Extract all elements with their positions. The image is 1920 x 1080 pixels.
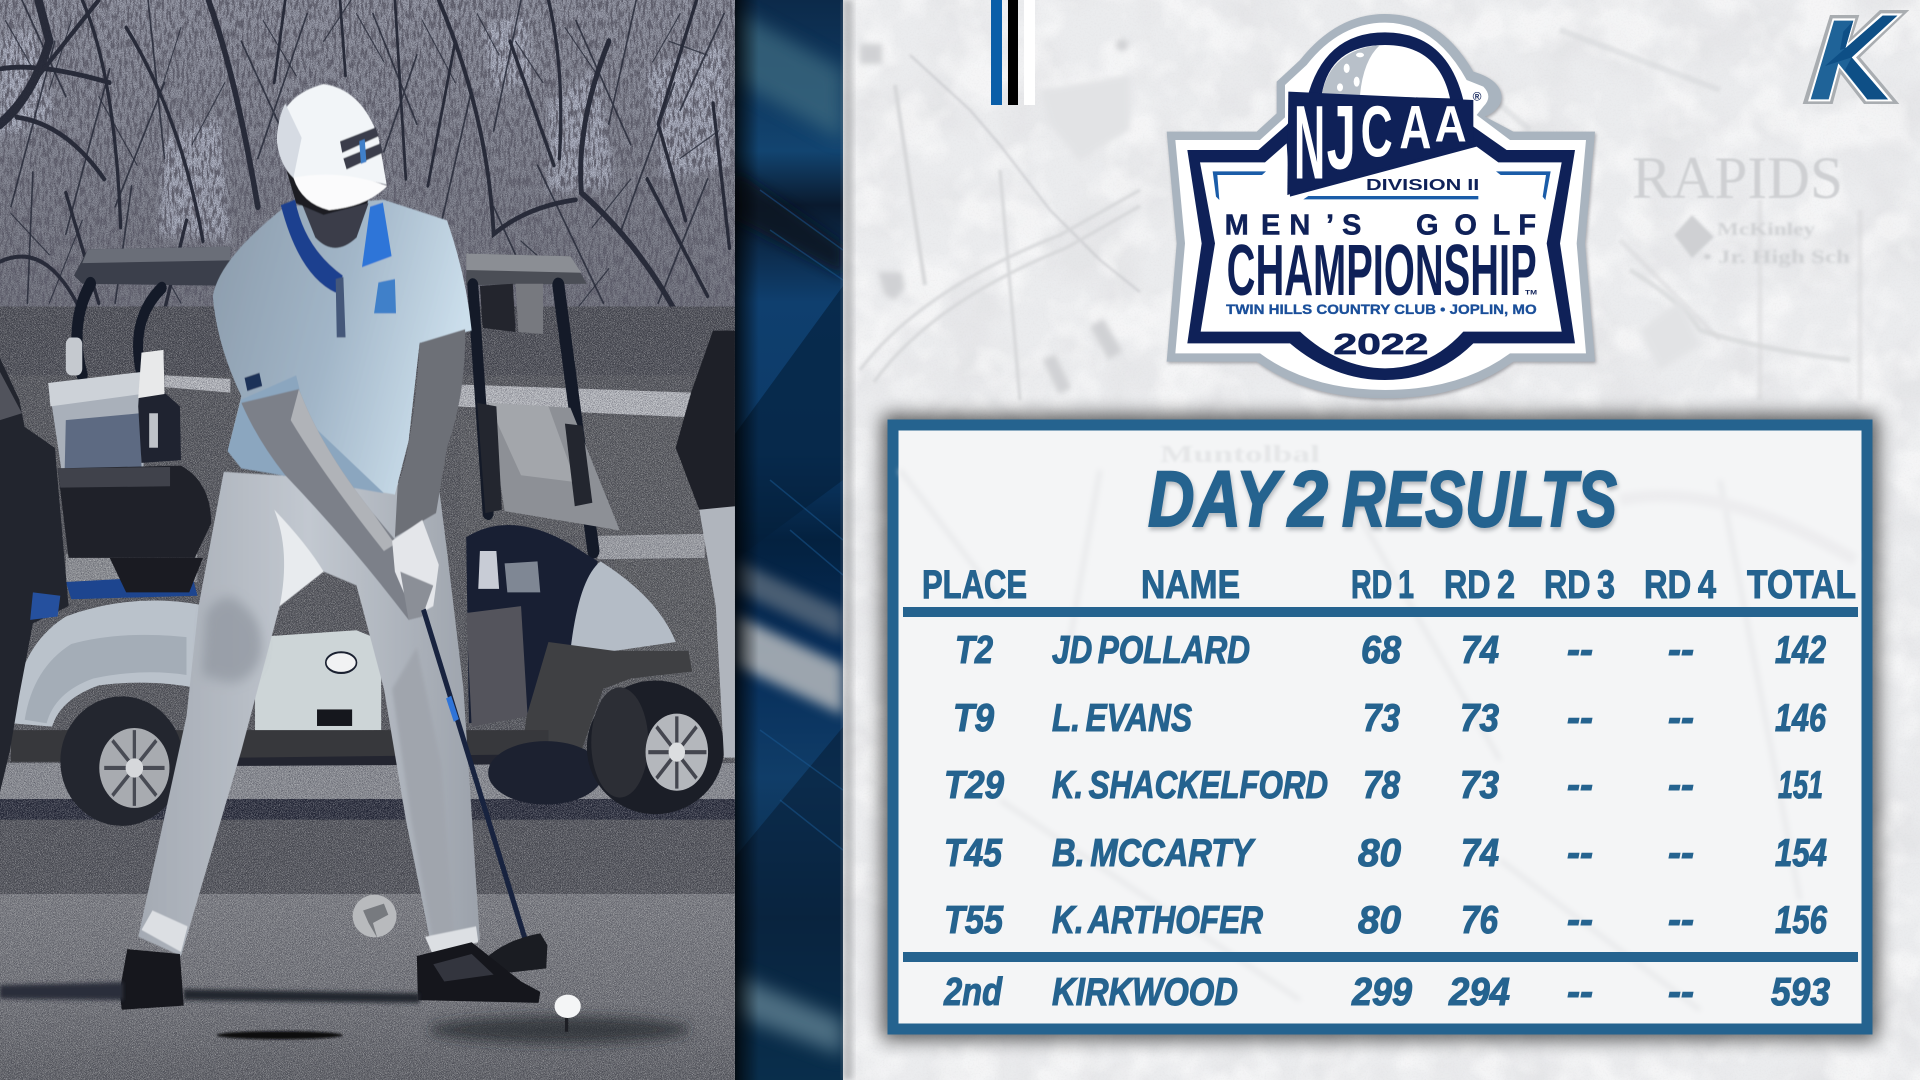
- hedge and cart path: [0, 307, 735, 847]
- row: K. Arthofer: T55: [944, 899, 1004, 942]
- map label: McKinley: McKinley: [1717, 219, 1815, 239]
- NJCAA banner: C: [1361, 92, 1393, 172]
- row: K. Arthofer: 76: [1461, 899, 1498, 942]
- row: team total Kirkwood: 593: [1771, 971, 1830, 1014]
- collar: [281, 200, 343, 293]
- icon: hawk watermark: [353, 895, 397, 938]
- panel: day 2 results table: [882, 414, 1878, 1040]
- row: team total Kirkwood: 294: [1448, 971, 1510, 1014]
- golf cart: [11, 247, 724, 826]
- row: B. McCarty: B. MCCARTY: [1052, 832, 1255, 875]
- heading: 2: [1286, 454, 1328, 543]
- panel: abstract blue streak stripe: [735, 0, 843, 1080]
- logo white layer: [1175, 23, 1586, 390]
- NJCAA banner: [1287, 84, 1473, 202]
- row: K. Shackelford: [944, 764, 1823, 807]
- row: K. Shackelford: 151: [1778, 764, 1823, 807]
- row: JD Pollard: 142: [1775, 629, 1826, 672]
- blue corner accents: [1213, 171, 1551, 200]
- table header row: TOTAL: [1747, 563, 1856, 607]
- table header row: RD 1: [1351, 563, 1414, 607]
- row: L. Evans: T9: [953, 697, 994, 740]
- logo white centre: [1200, 143, 1562, 368]
- row: K. Shackelford: 73: [1460, 764, 1499, 807]
- photo: golfer teeing off by a golf cart: [0, 0, 735, 1080]
- Division II text: DIVISION II: [1366, 177, 1479, 194]
- row: L. Evans: 146: [1775, 697, 1826, 740]
- registered mark: ®: [1473, 90, 1482, 104]
- row: B. McCarty: T45: [944, 832, 1003, 875]
- row: team total Kirkwood: 299: [1351, 971, 1412, 1014]
- row: K. Arthofer: K. ARTHOFER: [1052, 899, 1263, 942]
- table header row: NAME: [1141, 563, 1240, 607]
- pants: [138, 472, 480, 956]
- table header row: RD 2: [1444, 563, 1515, 607]
- map marker: school: [1674, 215, 1714, 258]
- venue text: TWIN HILLS COUNTRY CLUB • JOPLIN, MO: [1226, 301, 1537, 317]
- NJCAA banner: A: [1399, 95, 1431, 162]
- row: team total Kirkwood: [943, 971, 1830, 1014]
- logo grey outer silhouette: [1167, 14, 1595, 398]
- map label: Jr. High Sch: • Jr. High Sch: [1703, 247, 1851, 268]
- row: B. McCarty: --: [1668, 832, 1694, 875]
- row: JD Pollard: 68: [1361, 629, 1401, 672]
- row: JD Pollard: T2: [955, 629, 993, 672]
- row: JD Pollard: 74: [1461, 629, 1499, 672]
- shirt: [213, 200, 472, 495]
- golf ball on tee: [555, 995, 581, 1032]
- logo: NJCAA Division II Men's Golf Championship: [1166, 14, 1598, 402]
- head and cap: [277, 131, 370, 215]
- map label: Rapids: RAPIDS: [1632, 145, 1843, 211]
- NJCAA banner: A: [1435, 97, 1467, 153]
- bystander: right: [676, 331, 735, 758]
- bystander: left: [0, 358, 69, 792]
- row: K. Arthofer: --: [1567, 899, 1593, 942]
- row: B. McCarty: [944, 832, 1827, 875]
- icon: golf ball: [1322, 45, 1450, 98]
- row: team total Kirkwood: --: [1668, 971, 1694, 1014]
- arms: [242, 388, 408, 620]
- heading: RESULTS: [1342, 454, 1617, 543]
- row: K. Shackelford: T29: [944, 764, 1004, 807]
- row: L. Evans: 73: [1363, 697, 1400, 740]
- row: team total Kirkwood: 2nd: [943, 971, 1003, 1014]
- row: B. McCarty: --: [1567, 832, 1593, 875]
- row: JD Pollard: JD POLLARD: [1052, 629, 1250, 672]
- row: JD Pollard: --: [1567, 629, 1593, 672]
- row: B. McCarty: 74: [1461, 832, 1499, 875]
- tree line background: [0, 0, 735, 331]
- heading: [1148, 454, 1617, 543]
- hand and glove: [392, 520, 439, 616]
- row: L. Evans: [953, 697, 1826, 740]
- NJCAA banner: N: [1294, 84, 1325, 202]
- row: K. Arthofer: 80: [1358, 899, 1401, 942]
- table header row: RD 3: [1544, 563, 1615, 607]
- Men's Golf text: MEN’SGOLF: [1225, 209, 1536, 241]
- row: K. Shackelford: 78: [1363, 764, 1400, 807]
- watermark map label: Muntolbal: [1160, 442, 1320, 468]
- NJCAA banner: J: [1327, 86, 1356, 188]
- row: K. Arthofer: [944, 899, 1827, 942]
- row: team total Kirkwood: KIRKWOOD: [1052, 971, 1238, 1014]
- background: faded street map: [843, 0, 1920, 1080]
- icon: Kirkwood K logo: [1802, 10, 1910, 104]
- shoes: [120, 942, 540, 1010]
- row: L. Evans: 73: [1460, 697, 1499, 740]
- golf club: [423, 610, 547, 973]
- row: K. Arthofer: --: [1668, 899, 1694, 942]
- rough grass and fairway: [0, 820, 735, 1080]
- table header row: [922, 563, 1856, 607]
- row: K. Arthofer: 156: [1775, 899, 1827, 942]
- row: L. Evans: --: [1668, 697, 1694, 740]
- row: K. Shackelford: K. SHACKELFORD: [1052, 764, 1328, 807]
- row: B. McCarty: 80: [1358, 832, 1401, 875]
- accent bars: [991, 0, 1035, 105]
- row: B. McCarty: 154: [1775, 832, 1827, 875]
- row: L. Evans: L. EVANS: [1052, 697, 1192, 740]
- heading: DAY: [1148, 454, 1284, 543]
- row: team total Kirkwood: --: [1567, 971, 1593, 1014]
- table header row: RD 4: [1644, 563, 1717, 607]
- table header row: PLACE: [922, 563, 1027, 607]
- trademark: TM: [1525, 290, 1538, 297]
- row: L. Evans: --: [1567, 697, 1593, 740]
- shadow: stripe edge: [843, 0, 853, 1080]
- row: JD Pollard: [955, 629, 1826, 672]
- row: K. Shackelford: --: [1567, 764, 1593, 807]
- year: 2022: [1333, 329, 1428, 361]
- logo navy frame: [1187, 32, 1575, 380]
- row: K. Shackelford: --: [1668, 764, 1694, 807]
- golfer: [138, 84, 480, 956]
- shadows on the tee: [0, 982, 691, 1043]
- row: JD Pollard: --: [1668, 629, 1694, 672]
